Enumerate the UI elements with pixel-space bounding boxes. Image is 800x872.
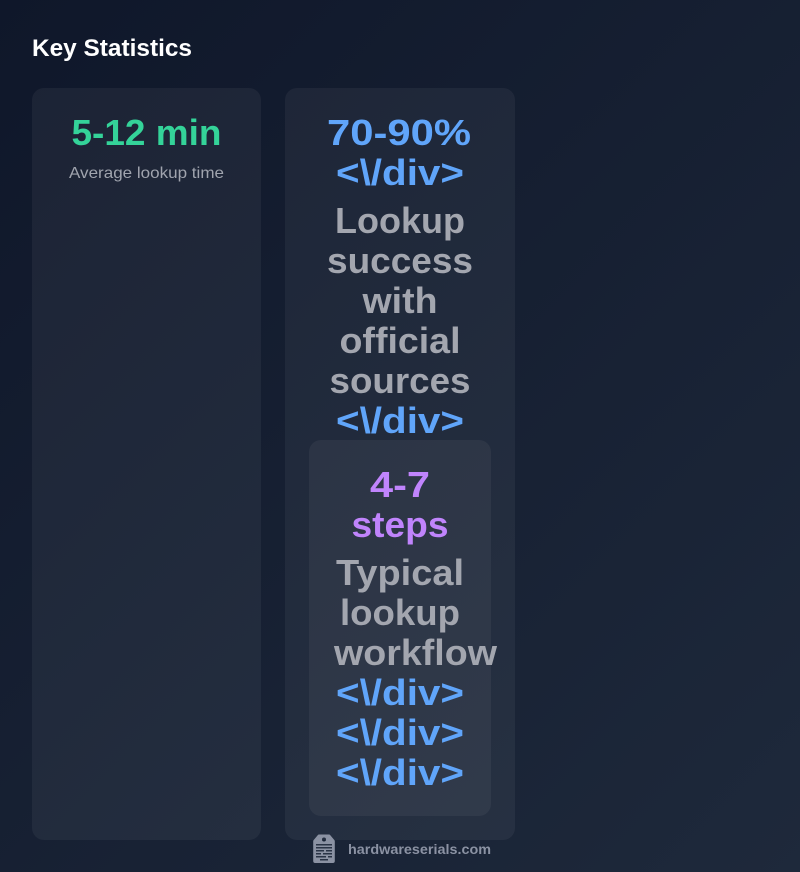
stat label: lookup success with official sources: success [327, 240, 473, 281]
stat label: average lookup time: Average lookup time [69, 165, 224, 182]
stat label: lookup success with official sources [327, 200, 473, 401]
title: Key Statistics [32, 35, 192, 62]
stat label: typical lookup workflow: lookup [340, 592, 460, 633]
stat value: 4-7 steps: steps [352, 504, 448, 545]
stat value: 4-7 steps [352, 464, 448, 545]
panel: average lookup time [32, 88, 261, 840]
stray markup text: <\/div> [336, 712, 464, 753]
stray markup text: <\/div> [336, 672, 464, 713]
stat label: lookup success with official sources: official [340, 320, 460, 361]
stat label: lookup success with official sources: sources [330, 360, 470, 401]
stat value: 4-7 steps: 4-7 [370, 464, 430, 505]
stray markup text: <\/div> [336, 152, 464, 193]
stat label: typical lookup workflow: Typical [336, 552, 464, 593]
stat label: lookup success with official sources: with [361, 280, 438, 321]
icon: serial tag [313, 834, 335, 863]
brand name: hardwareserials.com [348, 841, 491, 857]
stray markup text: <\/div> [336, 400, 464, 441]
stat label: typical lookup workflow [333, 552, 498, 673]
stat label: lookup success with official sources: Lookup [335, 200, 465, 241]
stat value: 70-90%: 70-90% [327, 112, 471, 153]
nested panel: typical lookup workflow [309, 440, 498, 816]
stat value: 5-12 min: 5-12 min [72, 112, 222, 153]
footer brand [313, 834, 491, 863]
stray markup text: <\/div> [336, 752, 464, 793]
stat label: typical lookup workflow: workflow [333, 632, 498, 673]
panel: lookup success [285, 88, 515, 840]
